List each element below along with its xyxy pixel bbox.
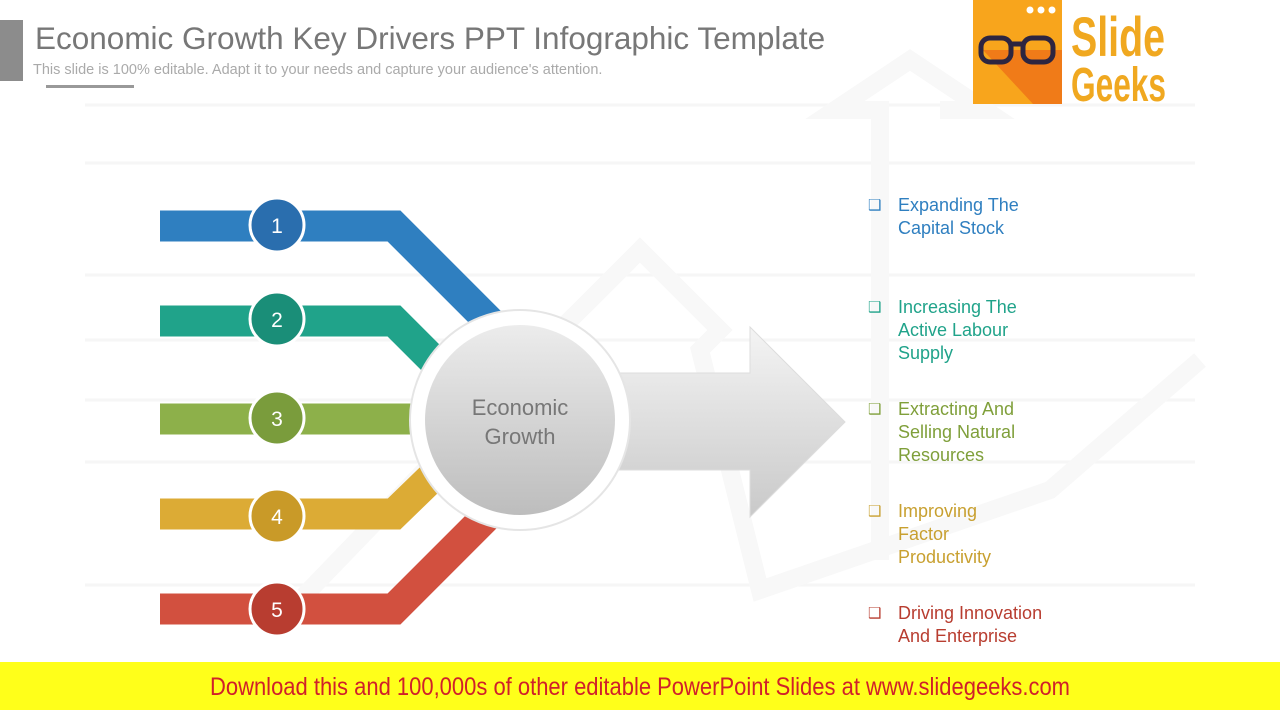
text: Factor bbox=[898, 524, 949, 544]
text: Productivity bbox=[898, 547, 991, 567]
text: ❑ bbox=[868, 605, 881, 622]
text: ❑ bbox=[868, 401, 881, 418]
text: ❑ bbox=[868, 299, 881, 316]
center circle: Economic bbox=[472, 395, 568, 420]
text: And Enterprise bbox=[898, 626, 1017, 646]
text: Extracting And bbox=[898, 399, 1014, 419]
footer banner: Download this and 100,000s of other editable PowerPoint Slides at www.slidegeeks.com bbox=[210, 673, 1070, 701]
arrow bbox=[600, 327, 845, 517]
number badges bbox=[250, 198, 304, 636]
subtitle: This slide is 100% editable. Adapt it to your needs and capture your audience's attention. bbox=[33, 62, 602, 78]
text: Increasing The bbox=[898, 297, 1017, 317]
list items: Capital Stock bbox=[898, 218, 1004, 238]
list items: Expanding The bbox=[898, 195, 1019, 215]
number badges: 2 bbox=[271, 309, 283, 332]
text: Selling Natural bbox=[898, 422, 1015, 442]
title bar accent bbox=[0, 20, 23, 81]
text: Resources bbox=[898, 445, 984, 465]
text: Active Labour bbox=[898, 320, 1008, 340]
text: ❑ bbox=[868, 503, 881, 520]
text: Driving Innovation bbox=[898, 603, 1042, 623]
bands bbox=[160, 226, 520, 609]
list items bbox=[868, 195, 1019, 238]
text: Supply bbox=[898, 343, 953, 363]
number badges: 4 bbox=[271, 506, 283, 529]
title: Economic Growth Key Drivers PPT Infographic Template bbox=[35, 20, 825, 56]
number badges: 3 bbox=[271, 408, 283, 431]
center circle bbox=[410, 310, 630, 530]
footer banner bbox=[0, 662, 1280, 710]
text: Improving bbox=[898, 501, 977, 521]
list items: ❑ bbox=[868, 197, 881, 214]
number badges: 5 bbox=[271, 599, 283, 622]
center circle: Growth bbox=[485, 424, 555, 449]
number badges: 1 bbox=[271, 215, 283, 238]
logo bbox=[973, 0, 1166, 104]
